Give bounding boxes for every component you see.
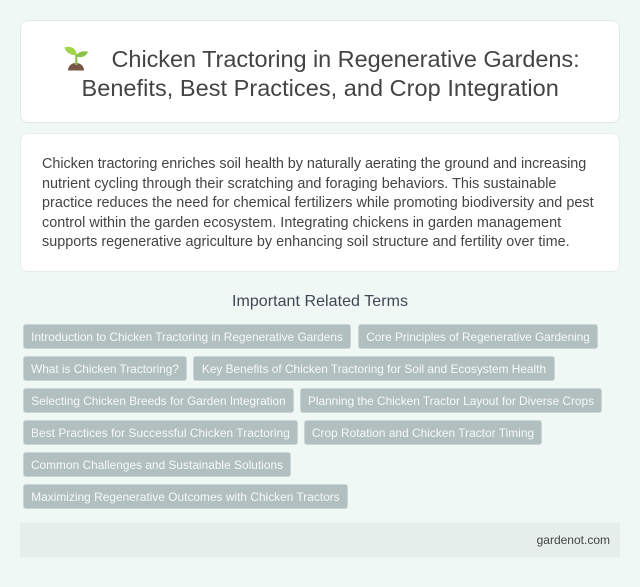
tag [23,452,291,477]
footer bar [20,523,620,557]
tag [23,324,351,349]
tag: Maximizing Regenerative Outcomes with Chicken Tractors [31,490,340,504]
summary text: nutrient cycling through their scratching and foraging behaviors. This sustainable [42,176,556,192]
footer source: gardenot.com [537,533,610,547]
tag [304,420,542,445]
tag [358,324,598,349]
tag [23,356,187,381]
summary text: supports regenerative agriculture by enhancing soil structure and fertility over time. [42,234,570,250]
panel: summary card [20,133,620,272]
icon: seedling [64,46,88,70]
title: Benefits, Best Practices, and Crop Integration [82,75,559,101]
tag: Common Challenges and Sustainable Solutions [31,458,283,472]
tag: Planning the Chicken Tractor Layout for Diverse Crops [308,394,594,408]
tag [300,388,602,413]
tag [23,420,298,445]
tag: Core Principles of Regenerative Gardening [366,330,590,344]
title [82,46,580,101]
panel: title card [20,20,620,123]
tag: Key Benefits of Chicken Tractoring for Soil and Ecosystem Health [202,362,546,376]
tag: What is Chicken Tractoring? [31,362,179,376]
heading: related terms: Important Related Terms [232,293,408,310]
summary text: control within the garden ecosystem. Integrating chickens in garden management [42,214,561,230]
tag: Selecting Chicken Breeds for Garden Integration [31,394,286,408]
tag [23,388,294,413]
title: Chicken Tractoring in Regenerative Gardens: [112,46,580,72]
summary text: Chicken tractoring enriches soil health by naturally aerating the ground and increasing [42,156,586,172]
tag: Crop Rotation and Chicken Tractor Timing [312,426,534,440]
summary text: practice reduces the need for chemical fertilizers while promoting biodiversity and pest [42,195,594,211]
tag: Best Practices for Successful Chicken Tractoring [31,426,290,440]
tag [23,484,348,509]
tag [193,356,555,381]
tag: Introduction to Chicken Tractoring in Regenerative Gardens [31,330,343,344]
summary text [42,156,594,250]
panel: term tags [23,324,602,509]
